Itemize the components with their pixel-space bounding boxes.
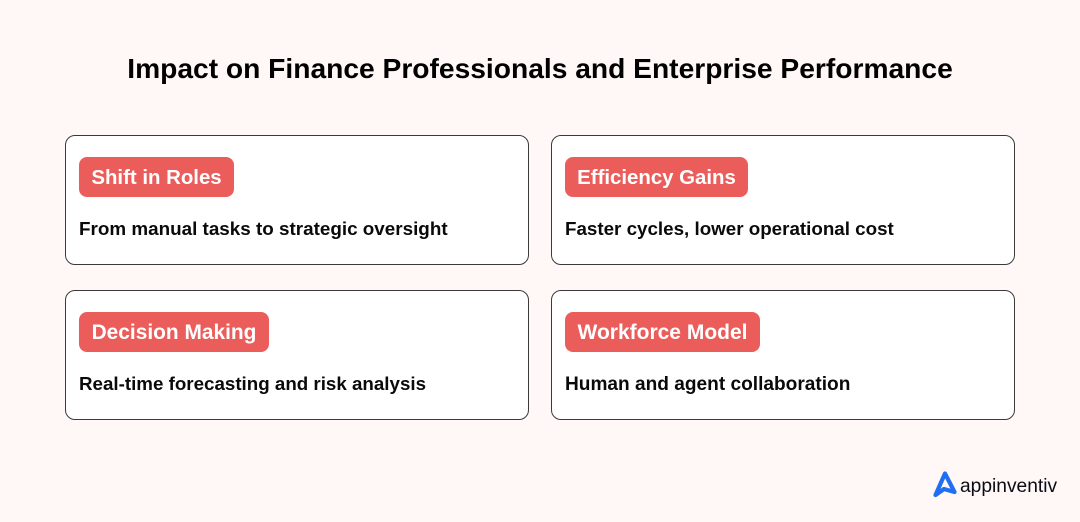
tag: decision making (79, 312, 269, 352)
tag: shift in roles (79, 157, 234, 197)
tag: efficiency gains (565, 157, 748, 197)
title: Impact on Finance Professionals and Enterprise Performance (127, 52, 953, 84)
text: decision making description: Real-time forecasting and risk analysis (79, 373, 426, 394)
logo wordmark: appinventiv (960, 476, 1057, 497)
text: workforce model description: Human and agent collaboration (565, 374, 850, 395)
icon: logo arrow (933, 471, 957, 498)
tag: decision making: Decision Making (92, 321, 256, 344)
panel: shift in roles (65, 135, 529, 265)
tag: efficiency gains: Efficiency Gains (577, 167, 736, 189)
tag: workforce model: Workforce Model (578, 321, 747, 344)
tag: shift in roles: Shift in Roles (91, 167, 222, 189)
panel: decision making (65, 290, 529, 420)
panel: workforce model (551, 290, 1015, 420)
panel: efficiency gains (551, 135, 1015, 265)
tag: workforce model (565, 312, 760, 352)
logo: appinventiv (933, 471, 1057, 498)
text: shift in roles description: From manual tasks to strategic oversight (79, 218, 448, 239)
text: efficiency gains description: Faster cycles, lower operational cost (565, 218, 894, 239)
